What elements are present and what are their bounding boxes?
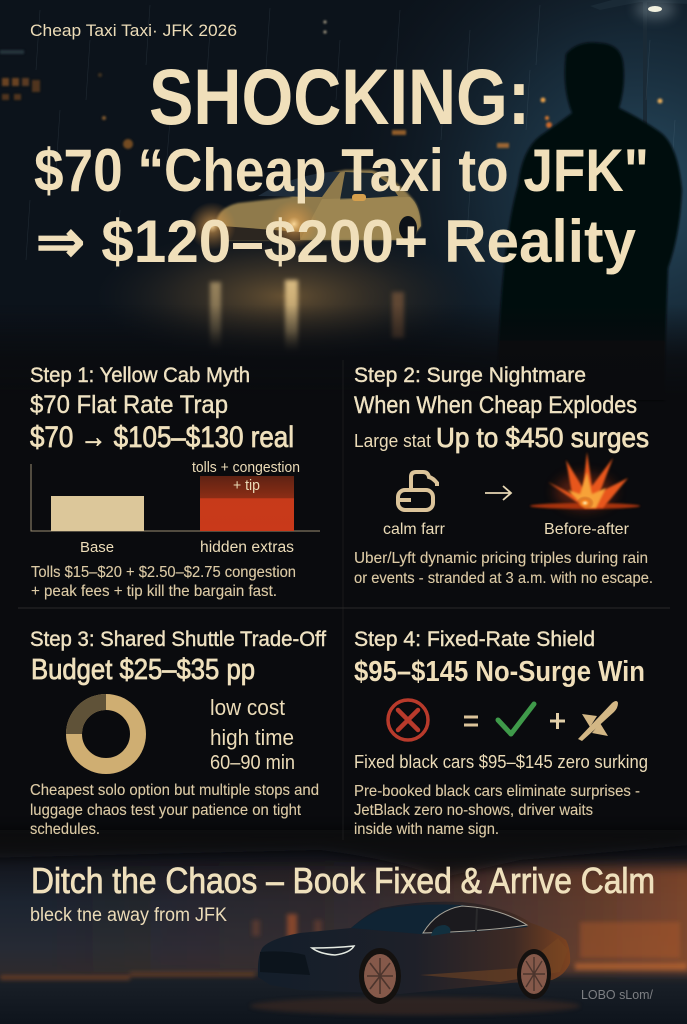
icon: open lock	[398, 472, 437, 510]
step 3 body text	[30, 782, 319, 838]
step 4 body text: inside with name sign.	[354, 821, 499, 838]
headline line 3: ⇒ $120–$200+ Reality	[36, 208, 637, 275]
mirror	[431, 925, 450, 936]
label: base: Base	[80, 539, 114, 556]
donut labels: low cost	[210, 695, 285, 720]
icon: red cross	[388, 700, 428, 740]
step 3 body text: schedules.	[30, 821, 100, 838]
road surface	[0, 240, 687, 370]
step 3 body text: Cheapest solo option but multiple stops and	[30, 782, 319, 799]
step 3 stat: Budget $25–$35 pp	[31, 654, 255, 686]
step 1 heading: Step 1: Yellow Cab Myth	[30, 364, 250, 387]
step 2 stat: Large stat	[354, 431, 431, 451]
plus sign	[550, 713, 565, 729]
bar annotation: + tip	[233, 478, 260, 494]
step 1 subheading: $70 Flat Rate Trap	[30, 391, 228, 419]
step 3 body text: luggage chaos test your patience on tight	[30, 802, 302, 819]
eyebrow label: Cheap Taxi Taxi· JFK 2026	[30, 21, 237, 40]
black sedan	[250, 902, 580, 1015]
step 2 body text: Uber/Lyft dynamic pricing triples during rain	[354, 550, 648, 567]
bar annotation: tolls + congestion	[192, 460, 300, 476]
windows	[351, 904, 528, 934]
logo mark: LOBO sLom/	[581, 987, 653, 1002]
closing subline: bleck tne away from JFK	[30, 905, 227, 926]
headlight reflections	[210, 280, 404, 352]
icon: plane	[578, 701, 618, 741]
equals sign	[464, 717, 478, 725]
panel: step 2	[354, 364, 653, 587]
bottom scene: dusk road	[0, 830, 687, 1024]
label: calm fare: calm farr	[383, 521, 446, 538]
step 2 body text: or events - stranded at 3 a.m. with no escape.	[354, 570, 653, 587]
yellow taxi	[188, 170, 421, 250]
step 4 body text: Pre-booked black cars eliminate surprises -	[354, 783, 640, 800]
step 1 stat: $70 → $105–$130 real	[30, 421, 294, 454]
bar: hidden extras	[200, 476, 294, 531]
distant city lights	[0, 20, 662, 149]
bar chart: base vs hidden extras	[31, 460, 320, 556]
donut labels: high time	[210, 725, 294, 750]
step 4 fixed-rate line: Fixed black cars $95–$145 zero surking	[354, 752, 648, 772]
hero scene: rainy night street	[0, 0, 687, 400]
label: hidden extras: hidden extras	[200, 539, 294, 556]
icon: explosion	[530, 452, 640, 510]
car body	[258, 902, 570, 994]
headline line 1: SHOCKING:	[149, 52, 530, 141]
step 3 heading: Step 3: Shared Shuttle Trade-Off	[30, 628, 326, 651]
step 4 body text: JetBlack zero no-shows, driver waits	[354, 802, 593, 819]
street lamp	[590, 0, 687, 128]
step 1 body text	[31, 564, 296, 600]
icon: green check	[498, 704, 534, 734]
donut chart: cost vs time	[74, 702, 138, 766]
step 4 stat: $95–$145 No-Surge Win	[354, 656, 645, 688]
rear wheel	[517, 949, 551, 999]
step 1 body text: Tolls $15–$20 + $2.50–$2.75 congestion	[31, 564, 296, 581]
step 1 body text: + peak fees + tip kill the bargain fast.	[31, 583, 277, 600]
man silhouette	[498, 42, 682, 400]
step 2 stat	[354, 422, 649, 453]
step 4 heading: Step 4: Fixed-Rate Shield	[354, 628, 595, 651]
front wheel	[359, 948, 401, 1004]
panel: step 4	[354, 628, 648, 838]
bar: base	[51, 496, 144, 531]
donut labels	[210, 695, 295, 774]
dark hill silhouette	[0, 830, 687, 878]
panel: step 1	[30, 364, 320, 600]
step 2 heading: Step 2: Surge Nightmare	[354, 364, 586, 387]
step 2 subheading: When When Cheap Explodes	[354, 392, 637, 419]
label: before-after: Before-after	[544, 521, 630, 538]
step 4 body text	[354, 783, 640, 838]
headlight	[312, 946, 354, 955]
blurred horizon lights	[0, 914, 687, 980]
panel: step 3	[30, 628, 326, 838]
arrow	[485, 486, 511, 500]
step 2 stat: Up to $450 surges	[436, 422, 649, 453]
rain streaks	[26, 5, 675, 270]
step 2 body text	[354, 550, 653, 587]
call to action	[30, 860, 655, 1002]
bar annotation	[192, 460, 300, 494]
donut labels: 60–90 min	[210, 752, 295, 774]
side sheen	[420, 938, 568, 982]
grille	[260, 951, 310, 975]
title block	[30, 21, 649, 275]
